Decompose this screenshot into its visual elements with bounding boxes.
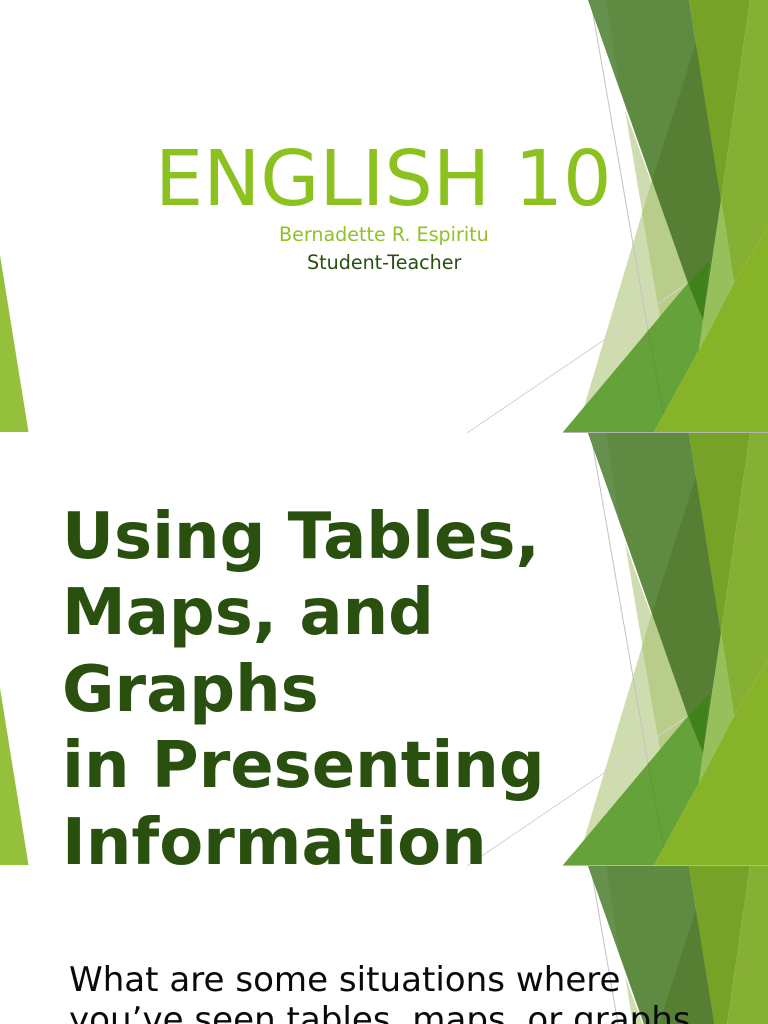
heading: Using Tables, Maps, and Graphs in Presenting Information: Graphs (62, 652, 319, 726)
heading: Using Tables, Maps, and Graphs in Presenting Information: in Presenting (62, 729, 545, 803)
heading: Using Tables, Maps, and Graphs in Presenting Information (62, 500, 545, 880)
heading: Using Tables, Maps, and Graphs in Presenting Information: Using Tables, (62, 500, 540, 574)
title: English 10: ENGLISH 10 (155, 134, 612, 223)
heading: Using Tables, Maps, and Graphs in Presenting Information: Information (62, 806, 487, 880)
slide 2 decoration (0, 433, 768, 866)
slide 1 decoration (0, 0, 768, 433)
question text: What are some situations where (69, 960, 621, 1000)
slide 3 decoration (0, 866, 768, 1024)
heading: Using Tables, Maps, and Graphs in Presenting Information: Maps, and (62, 576, 434, 650)
question text (69, 960, 691, 1024)
author name: Bernadette R. Espiritu (279, 223, 489, 246)
author role: Student-Teacher (307, 251, 461, 274)
